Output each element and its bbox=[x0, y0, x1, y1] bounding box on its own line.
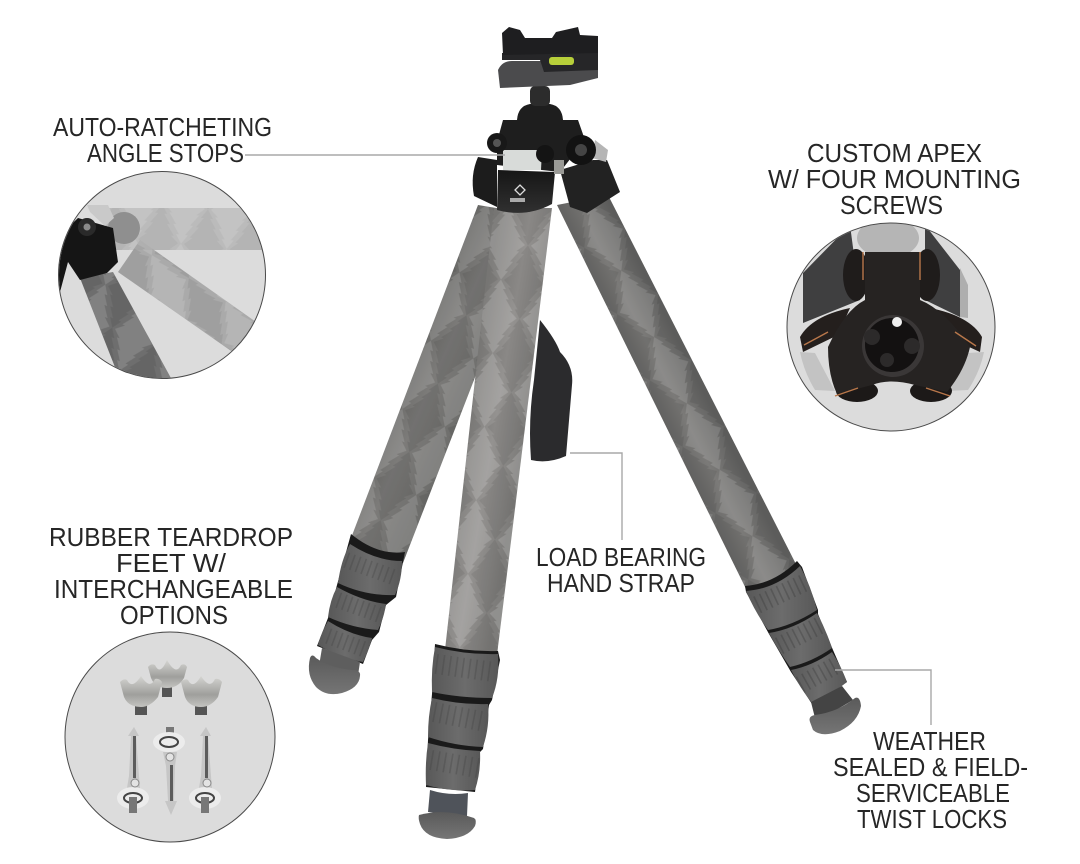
label: rubber teardrop feet: RUBBER TEARDROP bbox=[49, 522, 293, 552]
side knobs bbox=[800, 308, 850, 352]
label: custom apex bbox=[768, 138, 1021, 220]
label: rubber teardrop feet: INTERCHANGEABLE bbox=[54, 574, 293, 604]
callout line: angle stops bbox=[245, 154, 505, 156]
label: weather sealed twist locks bbox=[833, 726, 1028, 834]
right leg twist locks and foot bbox=[745, 561, 861, 734]
label: rubber teardrop feet: FEET W/ bbox=[116, 548, 227, 578]
label: load bearing hand strap: HAND STRAP bbox=[547, 568, 695, 598]
ghost diagonal leg bbox=[118, 240, 256, 353]
grey side domes bbox=[800, 352, 835, 391]
left leg twist locks and foot bbox=[309, 534, 405, 694]
label: custom apex: CUSTOM APEX bbox=[807, 138, 982, 168]
ball head bbox=[498, 27, 598, 120]
top knobs bbox=[843, 249, 865, 301]
carbon tubes seen from below bbox=[803, 225, 860, 323]
tripod left leg bbox=[348, 205, 538, 563]
label: auto-ratcheting angle stops: ANGLE STOPS bbox=[87, 138, 244, 168]
spike left bbox=[117, 727, 149, 813]
tripod photo bbox=[309, 27, 861, 839]
spiked cup feet bbox=[120, 660, 222, 715]
label: load bearing hand strap bbox=[536, 542, 706, 598]
ghost horizontal leg bbox=[105, 208, 270, 250]
callout line: hand strap bbox=[570, 453, 622, 540]
label: custom apex: W/ FOUR MOUNTING bbox=[768, 164, 1021, 194]
copper accents bbox=[804, 252, 976, 396]
logo mark bbox=[510, 185, 525, 202]
apex body bbox=[828, 252, 970, 394]
front leg bbox=[80, 272, 172, 380]
label: weather sealed twist locks: SEALED & FIELD- bbox=[833, 752, 1028, 782]
hand strap bbox=[530, 320, 572, 461]
top dome bbox=[857, 224, 919, 252]
label: weather sealed twist locks: WEATHER bbox=[873, 726, 986, 756]
panel: angle stops detail circle bbox=[55, 172, 270, 380]
black apex bbox=[55, 218, 118, 292]
apex and leg collars bbox=[473, 120, 620, 213]
label: auto-ratcheting angle stops: AUTO-RATCHETING bbox=[53, 112, 272, 142]
spike right bbox=[189, 727, 221, 813]
spike centre bbox=[153, 727, 185, 815]
tripod centre leg bbox=[445, 208, 552, 655]
label: load bearing hand strap: LOAD BEARING bbox=[536, 542, 706, 572]
label: weather sealed twist locks: TWIST LOCKS bbox=[857, 804, 1007, 834]
panel: custom apex detail circle bbox=[787, 218, 995, 431]
label: rubber teardrop feet bbox=[49, 522, 293, 630]
label: auto-ratcheting angle stops bbox=[53, 112, 272, 168]
lower knobs bbox=[836, 384, 878, 402]
panel: interchangeable feet detail circle bbox=[65, 632, 275, 842]
label: rubber teardrop feet: OPTIONS bbox=[120, 600, 228, 630]
tripod right leg bbox=[557, 195, 800, 597]
centre leg twist locks and foot bbox=[419, 644, 500, 839]
callout line: twist locks bbox=[835, 670, 931, 725]
label: custom apex: SCREWS bbox=[840, 190, 943, 220]
ghost leg hub bbox=[108, 212, 140, 244]
mounting holes bbox=[864, 329, 880, 345]
label: weather sealed twist locks: SERVICEABLE bbox=[856, 778, 1010, 808]
